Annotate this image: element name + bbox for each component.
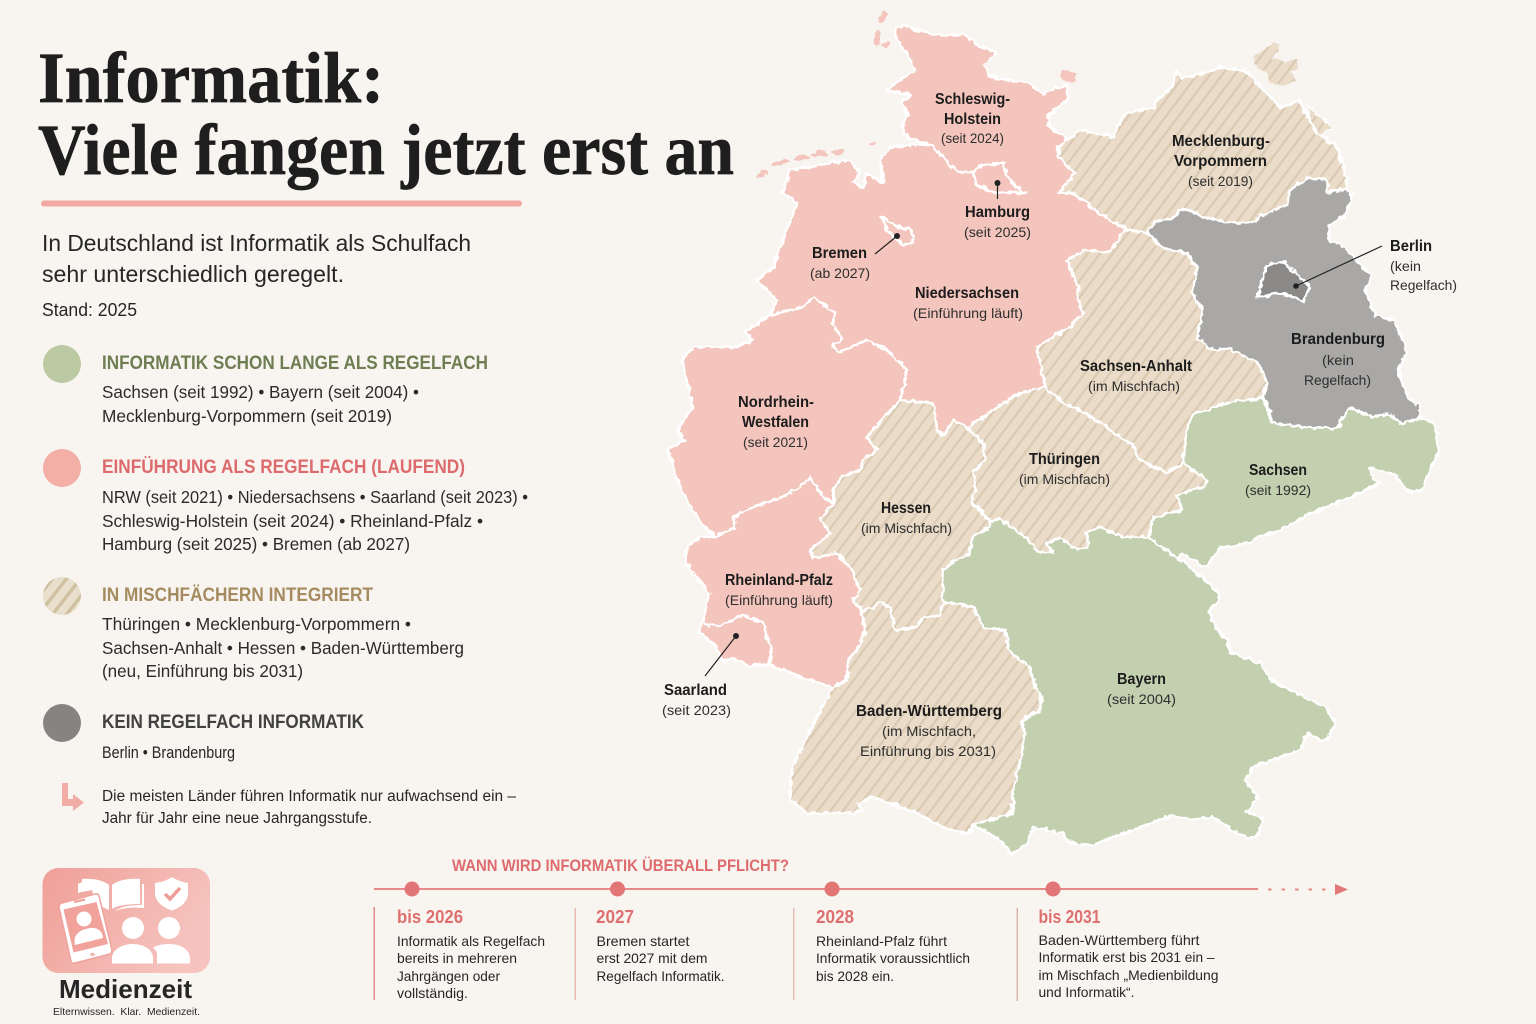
label: Mecklenburg-Vorpommern: Mecklenburg- bbox=[1172, 133, 1270, 150]
island: Usedom bbox=[1307, 105, 1333, 135]
legend item: schon lange Regelfach bbox=[43, 345, 488, 426]
label: Brandenburg bbox=[1291, 331, 1385, 388]
note text: Jahr für Jahr eine neue Jahrgangsstufe. bbox=[102, 810, 372, 827]
label: Sachsen-Anhalt: (im Mischfach) bbox=[1088, 378, 1180, 394]
legend item: kein Regelfach bbox=[43, 704, 364, 762]
label: Brandenburg: (kein bbox=[1322, 352, 1354, 368]
title bbox=[38, 38, 734, 190]
intro text: sehr unterschiedlich geregelt. bbox=[42, 261, 344, 287]
label: Brandenburg: Regelfach) bbox=[1304, 372, 1371, 388]
hatching overlay on Mischfach states bbox=[791, 42, 1346, 832]
state: Niedersachsen bbox=[757, 144, 1128, 437]
intro text: In Deutschland ist Informatik als Schulfach bbox=[42, 230, 471, 256]
legend item: Einführung laufend: Schleswig-Holstein (seit 2024) • Rheinland-Pfalz • bbox=[102, 511, 483, 531]
label: Thüringen: Thüringen bbox=[1029, 451, 1100, 468]
legend item: Einführung laufend: Hamburg (seit 2025) • Bremen (ab 2027) bbox=[102, 534, 410, 554]
state: Schleswig-Holstein bbox=[887, 25, 1075, 193]
label: Hessen bbox=[861, 500, 952, 536]
label: Baden-Württemberg: Einführung bis 2031) bbox=[860, 743, 996, 759]
label: Bremen bbox=[810, 245, 870, 281]
state: Nordrhein-Westfalen bbox=[668, 297, 907, 537]
panel: timeline bbox=[374, 856, 1348, 1001]
islands: Nordsee and Ostsee bbox=[754, 10, 1078, 180]
label: Berlin: (kein bbox=[1390, 258, 1421, 274]
inner coast gaps bbox=[896, 58, 996, 74]
label: Berlin bbox=[1390, 238, 1457, 293]
label: Saarland bbox=[662, 682, 731, 718]
seam patch between Schleswig-Holstein and Niedersachsen bbox=[1027, 188, 1056, 196]
label: Baden-Württemberg: Baden-Württemberg bbox=[856, 703, 1002, 720]
intro text bbox=[42, 230, 471, 320]
state: Berlin bbox=[1257, 262, 1310, 302]
intro text: Stand: 2025 bbox=[42, 300, 137, 320]
timeline column bis 2026: Informatik als Regelfach bbox=[397, 933, 545, 949]
legend item: schon lange Regelfach: Sachsen (seit 1992) • Bayern (seit 2004) • bbox=[102, 382, 419, 402]
timeline column bis 2026 bbox=[374, 907, 545, 1001]
label: Baden-Württemberg bbox=[856, 703, 1002, 759]
icon: phone with person bbox=[59, 894, 112, 963]
state: Bayern bbox=[943, 518, 1335, 855]
state: Bremen bbox=[882, 217, 912, 245]
leader: Berlin bbox=[1293, 246, 1382, 289]
timeline column 2028: bis 2028 ein. bbox=[816, 968, 894, 984]
state: Sachsen-Anhalt bbox=[1037, 230, 1267, 473]
label: Brandenburg: Brandenburg bbox=[1291, 331, 1385, 348]
label: Thüringen: (im Mischfach) bbox=[1019, 471, 1110, 487]
label: Schleswig-Holstein: Schleswig- bbox=[935, 91, 1010, 108]
state: Thüringen bbox=[967, 387, 1207, 553]
label: Berlin: Regelfach) bbox=[1390, 277, 1457, 293]
timeline column 2027: Regelfach Informatik. bbox=[596, 968, 724, 984]
legend item: Mischfächer: Thüringen • Mecklenburg-Vorpommern • bbox=[102, 614, 411, 634]
label: Mecklenburg-Vorpommern: (seit 2019) bbox=[1188, 173, 1253, 189]
label: Bayern bbox=[1107, 671, 1176, 707]
state: Hessen bbox=[810, 400, 990, 630]
timeline column 2028 bbox=[793, 907, 970, 1000]
legend item: Einführung laufend: EINFÜHRUNG ALS REGELFACH (LAUFEND) bbox=[102, 457, 465, 478]
label: Niedersachsen: Niedersachsen bbox=[915, 285, 1019, 302]
legend item: kein Regelfach: Berlin • Brandenburg bbox=[102, 744, 235, 762]
legend item: Einführung laufend bbox=[43, 449, 528, 554]
timeline column bis 2031: bis 2031 bbox=[1038, 907, 1100, 927]
state: Sachsen bbox=[1148, 398, 1439, 567]
label: Hessen: (im Mischfach) bbox=[861, 520, 952, 536]
label: Saarland: Saarland bbox=[664, 682, 727, 699]
timeline column 2027: erst 2027 mit dem bbox=[596, 950, 708, 966]
label: Sachsen: (seit 1992) bbox=[1245, 482, 1311, 498]
state: Mecklenburg-Vorpommern bbox=[1058, 67, 1348, 233]
timeline column 2028: 2028 bbox=[816, 907, 854, 927]
icon: shield with check bbox=[155, 877, 188, 910]
label: Mecklenburg-Vorpommern bbox=[1172, 133, 1270, 189]
label: Mecklenburg-Vorpommern: Vorpommern bbox=[1174, 153, 1267, 170]
label: Rheinland-Pfalz bbox=[725, 572, 833, 608]
timeline column bis 2031 bbox=[1016, 907, 1218, 1001]
label: Nordrhein-Westfalen bbox=[738, 394, 814, 450]
timeline column 2027 bbox=[574, 907, 724, 1000]
leader: Saarland bbox=[705, 633, 739, 676]
timeline column bis 2031: und Informatik“. bbox=[1038, 984, 1134, 1000]
state: Baden-Württemberg bbox=[790, 603, 1042, 835]
title underline bbox=[41, 200, 522, 206]
panel: map shapes of Germany bbox=[668, 10, 1439, 855]
timeline column bis 2031: Baden-Württemberg führt bbox=[1038, 932, 1200, 948]
label: Bayern: Bayern bbox=[1117, 671, 1166, 688]
label: Sachsen-Anhalt: Sachsen-Anhalt bbox=[1080, 358, 1192, 375]
timeline column 2027: Bremen startet bbox=[596, 933, 690, 949]
label: Berlin: Berlin bbox=[1390, 238, 1432, 255]
logo wordmark: Medienzeit bbox=[59, 974, 192, 1004]
label: Baden-Württemberg: (im Mischfach, bbox=[882, 723, 976, 739]
timeline column bis 2031: Informatik erst bis 2031 ein – bbox=[1038, 949, 1215, 965]
note text bbox=[102, 788, 516, 827]
logo background bbox=[42, 868, 210, 973]
panel: logo Medienzeit bbox=[42, 868, 210, 1018]
label: Bayern: (seit 2004) bbox=[1107, 691, 1176, 707]
legend item: Mischfächer: Sachsen-Anhalt • Hessen • Baden-Württemberg bbox=[102, 638, 464, 658]
legend item: Einführung laufend: NRW (seit 2021) • Niedersachsens • Saarland (seit 2023) • bbox=[102, 487, 528, 507]
leader: Hamburg bbox=[994, 180, 1000, 199]
leader: Bremen bbox=[875, 233, 900, 254]
label: Sachsen: Sachsen bbox=[1249, 462, 1307, 479]
timeline column 2028: Rheinland-Pfalz führt bbox=[816, 933, 947, 949]
label: Schleswig-Holstein bbox=[935, 91, 1010, 146]
state: Rheinland-Pfalz bbox=[685, 477, 865, 687]
title: Informatik: bbox=[38, 38, 384, 118]
legend item: schon lange Regelfach: Mecklenburg-Vorpommern (seit 2019) bbox=[102, 406, 392, 426]
icon: open book bbox=[78, 879, 144, 911]
label: Nordrhein-Westfalen: (seit 2021) bbox=[743, 434, 808, 450]
label: Bremen: (ab 2027) bbox=[810, 265, 870, 281]
label: Nordrhein-Westfalen: Nordrhein- bbox=[738, 394, 814, 411]
label: Hessen: Hessen bbox=[881, 500, 931, 517]
label: Niedersachsen: (Einführung läuft) bbox=[913, 305, 1023, 321]
label: Thüringen bbox=[1019, 451, 1110, 487]
label: Hamburg bbox=[964, 204, 1031, 240]
label: Sachsen bbox=[1245, 462, 1311, 498]
label: Schleswig-Holstein: Holstein bbox=[944, 111, 1001, 128]
label: Schleswig-Holstein: (seit 2024) bbox=[941, 130, 1004, 146]
label: Sachsen-Anhalt bbox=[1080, 358, 1192, 394]
state: Brandenburg bbox=[1147, 178, 1420, 428]
legend item: Mischfächer: IN MISCHFÄCHERN INTEGRIERT bbox=[102, 585, 373, 606]
label: Rheinland-Pfalz: (Einführung läuft) bbox=[725, 592, 833, 608]
timeline column bis 2031: im Mischfach „Medienbildung bbox=[1038, 967, 1218, 983]
note text: Die meisten Länder führen Informatik nur aufwachsend ein – bbox=[102, 788, 516, 805]
legend item: schon lange Regelfach: INFORMATIK SCHON LANGE ALS REGELFACH bbox=[102, 353, 488, 374]
label: Rheinland-Pfalz: Rheinland-Pfalz bbox=[725, 572, 833, 589]
timeline column bis 2026: bis 2026 bbox=[397, 907, 463, 927]
timeline heading: WANN WIRD INFORMATIK ÜBERALL PFLICHT? bbox=[452, 856, 789, 875]
timeline column bis 2026: Jahrgängen oder bbox=[397, 968, 500, 984]
legend item: Mischfächer bbox=[43, 577, 464, 681]
timeline column bis 2026: bereits in mehreren bbox=[397, 950, 517, 966]
logo tagline: Elternwissen. Klar. Medienzeit. bbox=[53, 1006, 200, 1018]
label: Hamburg: (seit 2025) bbox=[964, 224, 1031, 240]
island: Rügen bbox=[1253, 42, 1297, 85]
state: Saarland bbox=[700, 615, 772, 665]
label: Hamburg: Hamburg bbox=[965, 204, 1030, 221]
timeline markers bbox=[404, 882, 1060, 896]
timeline axis arrow bbox=[374, 884, 1348, 895]
timeline column 2028: Informatik voraussichtlich bbox=[816, 950, 970, 966]
timeline column 2027: 2027 bbox=[596, 907, 634, 927]
legend item: kein Regelfach: KEIN REGELFACH INFORMATIK bbox=[102, 712, 364, 733]
title: Viele fangen jetzt erst an bbox=[38, 110, 734, 190]
timeline column bis 2026: vollständig. bbox=[397, 985, 468, 1001]
label: Saarland: (seit 2023) bbox=[662, 702, 731, 718]
label: Nordrhein-Westfalen: Westfalen bbox=[742, 414, 809, 431]
label: Niedersachsen bbox=[913, 285, 1023, 321]
icon: parent and child bbox=[112, 917, 190, 964]
legend item: Mischfächer: (neu, Einführung bis 2031) bbox=[102, 661, 303, 681]
label: Bremen: Bremen bbox=[812, 245, 867, 262]
panel: legend bbox=[43, 345, 528, 827]
icon: arrow note bbox=[62, 783, 84, 811]
state: Hamburg bbox=[972, 163, 1023, 193]
